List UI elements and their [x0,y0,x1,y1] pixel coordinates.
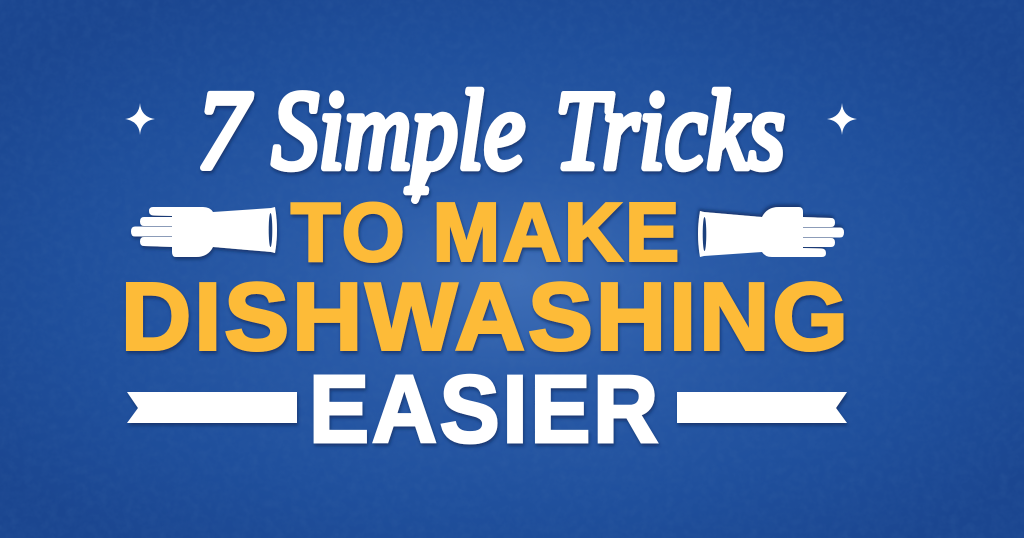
heading: EASIER: EASIER [309,356,661,463]
right ribbon [677,392,847,423]
title line: 7 Simple Tricks [197,69,785,200]
title line: 7 Simple Tricks: 7 [197,69,252,193]
icon: right glove [698,207,844,257]
title line: 7 Simple Tricks: Simple [272,69,525,193]
icon: right sparkle [827,103,857,135]
title line: 7 Simple Tricks: Tricks [555,69,785,193]
heading: TO MAKE: TO MAKE [291,186,682,278]
heading: DISHWASHING: DISHWASHING [121,264,851,370]
left ribbon [127,392,297,423]
icon: left glove [131,207,277,257]
icon: left sparkle [125,103,155,135]
